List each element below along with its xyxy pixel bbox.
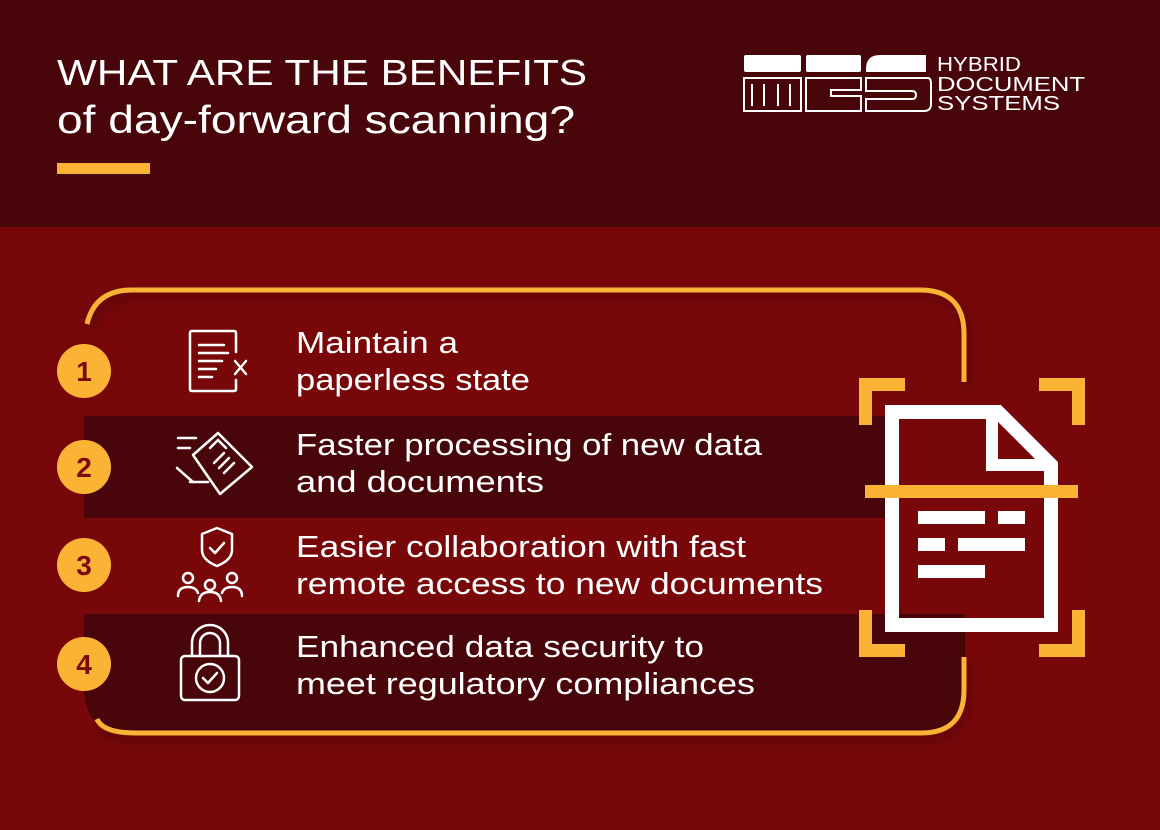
logo: DOCUMENT: [937, 74, 1085, 96]
benefit texts: paperless state: [296, 362, 530, 397]
scan document illustration: [859, 378, 1085, 657]
frame: [87, 290, 964, 733]
number badges: 4: [76, 649, 92, 680]
benefit texts: [296, 325, 823, 701]
benefit texts: Faster processing of new data: [296, 427, 763, 462]
benefit texts: Easier collaboration with fast: [296, 529, 746, 564]
title: of day-forward scanning?: [57, 99, 575, 142]
header band: [0, 0, 1160, 227]
logo: SYSTEMS: [937, 93, 1060, 115]
number badges: 1: [76, 356, 92, 387]
number badges: [57, 344, 111, 691]
number badges: 2: [76, 452, 92, 483]
title: WHAT ARE THE BENEFITS: [57, 52, 587, 93]
icon: collaboration: [178, 528, 242, 601]
title underline: [57, 163, 150, 174]
benefit texts: remote access to new documents: [296, 566, 823, 601]
logo: [744, 54, 1085, 115]
icon: paperless document: [190, 331, 246, 391]
benefit texts: and documents: [296, 464, 544, 499]
title: [57, 52, 587, 142]
icon: security lock: [181, 625, 239, 700]
logo: HYBRID: [937, 54, 1021, 76]
benefit texts: Maintain a: [296, 325, 459, 360]
benefit texts: meet regulatory compliances: [296, 666, 755, 701]
dark band row 2: [84, 416, 885, 518]
dark band row 4: [84, 614, 965, 733]
benefit texts: Enhanced data security to: [296, 629, 704, 664]
number badges: 3: [76, 550, 92, 581]
icon: fast processing: [177, 433, 252, 494]
